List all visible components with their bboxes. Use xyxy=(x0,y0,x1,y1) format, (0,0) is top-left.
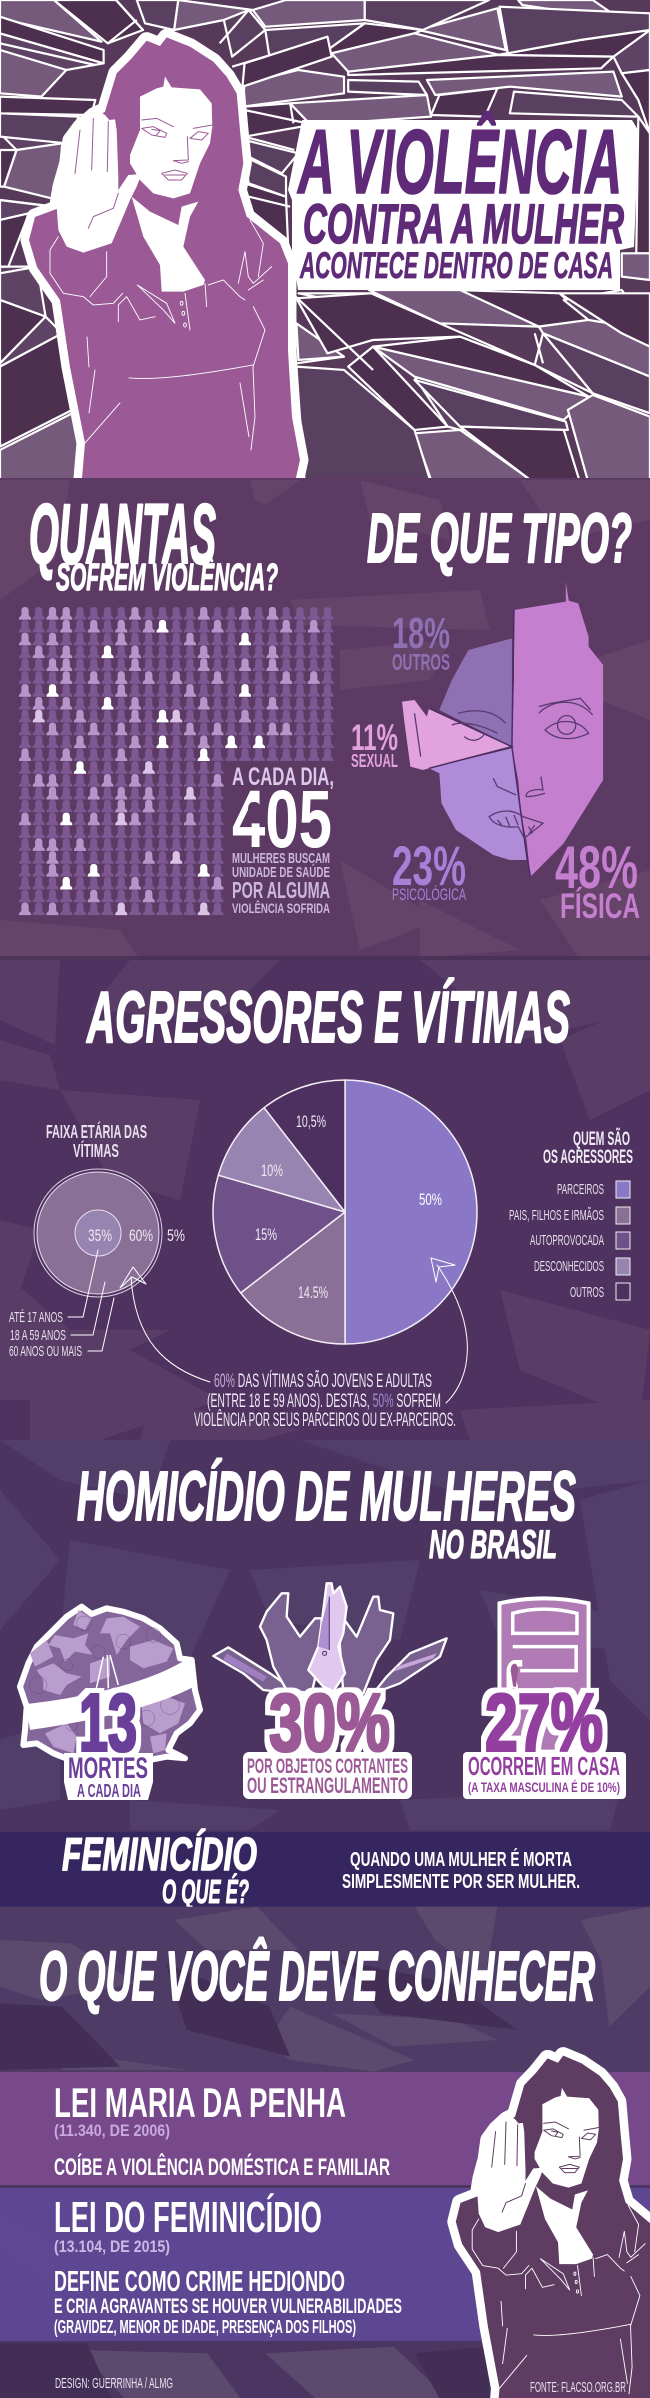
arrow: to 50% in pie xyxy=(431,1258,467,1403)
icon: door xyxy=(499,1598,589,1752)
chart: age range heading xyxy=(46,1121,147,1161)
illustration: face divided by violence type xyxy=(402,582,603,877)
band: lei maria da penha xyxy=(0,2072,650,2185)
stat: 30% objetos cortantes: POR OBJETOS CORTANTES xyxy=(247,1755,408,1778)
label: 23% psicológica: 23% xyxy=(392,834,466,897)
band: lei do feminicídio: (GRAVIDEZ, MENOR DE IDADE, PRESENÇA DOS FILHOS) xyxy=(54,2317,356,2337)
chart: age range leader lines and labels: 60 ANOS OU MAIS xyxy=(9,1343,82,1360)
label: 11% sexual xyxy=(351,717,398,771)
icon: funeral wreath xyxy=(20,1607,200,1760)
chart: pie value labels: 15% xyxy=(255,1225,277,1244)
title sticker background xyxy=(288,120,638,290)
band: lei do feminicídio: (13.104, DE 2015) xyxy=(54,2237,170,2256)
legend: who the aggressors are xyxy=(509,1128,633,1301)
label: 48% física xyxy=(555,834,640,926)
illustration: woman with raised hand xyxy=(29,37,300,490)
band: lei maria da penha: COÍBE A VIOLÊNCIA DOMÉSTICA E FAMILIAR xyxy=(54,2153,390,2181)
chart: pie value labels: 10% xyxy=(261,1161,283,1180)
illustration: woman with raised hand, dark xyxy=(456,2056,650,2398)
band: lei maria da penha: (11.340, DE 2006) xyxy=(54,2121,170,2140)
stat: 30% objetos cortantes: OU ESTRANGULAMENTO xyxy=(247,1773,408,1798)
credit: design: DESIGN: GUERRINHA / ALMG xyxy=(55,2375,173,2392)
panel: homicídio de mulheres xyxy=(0,1440,650,1910)
panel: o que você deve conhecer xyxy=(0,1907,650,2398)
band: feminicídio definition: FEMINICÍDIO xyxy=(62,1828,257,1880)
panel: quantas e de que tipo: QUANTAS xyxy=(29,487,216,581)
callout: victims and partners xyxy=(194,1370,456,1431)
chart: pie value labels: 50% xyxy=(419,1190,442,1209)
legend: who the aggressors are: PARCEIROS xyxy=(557,1181,604,1198)
stat: 13 mortes a cada dia: A CADA DIA xyxy=(77,1781,141,1801)
label: 11% sexual: SEXUAL xyxy=(351,751,398,771)
band: feminicídio definition xyxy=(0,1828,650,1910)
stat: 13 mortes a cada dia: MORTES xyxy=(68,1752,148,1785)
stat: 30% objetos cortantes: 30% xyxy=(269,1676,390,1769)
chart: pie value labels xyxy=(255,1112,442,1302)
band: lei do feminicídio: DEFINE COMO CRIME HEDIONDO xyxy=(54,2266,345,2298)
label: 23% psicológica xyxy=(392,834,466,904)
section background xyxy=(0,1907,650,2398)
chart: pie value labels: 14.5% xyxy=(298,1283,328,1302)
legend: who the aggressors are: OUTROS xyxy=(570,1284,604,1301)
label: 18% outros: 18% xyxy=(392,609,450,658)
chart: age range heading: VÍTIMAS xyxy=(73,1140,119,1161)
counter text: 405 per day: VIOLÊNCIA SOFRIDA xyxy=(232,899,330,916)
chart: age range leader lines and labels xyxy=(9,1250,114,1360)
label: 18% outros: OUTROS xyxy=(392,649,450,675)
icon: hands, knives and scissors xyxy=(213,1583,447,1693)
counter text: 405 per day: MULHERES BUSCAM xyxy=(232,850,330,867)
background: shattered glass xyxy=(0,0,650,483)
stat: 27% em casa xyxy=(463,1676,626,1799)
section background xyxy=(0,478,650,960)
band: lei do feminicídio xyxy=(0,2188,650,2341)
band: lei do feminicídio: LEI DO FEMINICÍDIO xyxy=(54,2192,322,2242)
chart: who the aggressors are pie xyxy=(213,1080,477,1344)
chart: age range donut: 35% xyxy=(88,1226,112,1245)
stat: 13 mortes a cada dia: 13 xyxy=(79,1676,137,1769)
counter text: 405 per day: A CADA DIA, xyxy=(232,763,334,791)
callout: victims and partners: 60% DAS VÍTIMAS SÃO JOVENS E ADULTAS xyxy=(214,1370,432,1392)
section background xyxy=(0,960,650,1440)
counter text: 405 per day xyxy=(232,763,334,916)
stat: 27% em casa: 27% xyxy=(485,1676,603,1769)
chart: age range donut: 5% xyxy=(167,1226,185,1245)
chart: age range leader lines and labels: ATÉ 17 ANOS xyxy=(9,1309,63,1326)
label: 18% outros xyxy=(392,609,450,675)
band: feminicídio definition: O QUE É? xyxy=(162,1873,249,1910)
panel: agressores e vítimas xyxy=(0,960,650,1440)
chart: pie value labels: 10,5% xyxy=(296,1112,326,1131)
chart: age range leader lines and labels: 18 A 59 ANOS xyxy=(10,1327,66,1344)
chart: age range donut: 60% xyxy=(129,1226,153,1245)
counter text: 405 per day: 405 xyxy=(232,774,332,865)
panel: quantas e de que tipo xyxy=(0,478,650,960)
section background xyxy=(0,1440,650,1910)
arrow: to 60% in donut xyxy=(120,1267,210,1382)
label: 23% psicológica: PSICOLÓGICA xyxy=(392,885,466,904)
stat: 13 mortes a cada dia xyxy=(64,1676,153,1801)
heading: no brasil: NO BRASIL xyxy=(429,1523,557,1567)
stat: 30% objetos cortantes xyxy=(243,1676,412,1799)
chart: age range donut xyxy=(34,1169,185,1297)
panel: hero xyxy=(0,0,650,490)
chart: age range heading: FAIXA ETÁRIA DAS xyxy=(46,1121,147,1142)
heading: sofrem violência: SOFREM VIOLÊNCIA? xyxy=(56,555,278,599)
counter text: 405 per day: UNIDADE DE SAÚDE xyxy=(232,863,330,881)
band: lei do feminicídio: E CRIA AGRAVANTES SE HOUVER VULNERABILIDADES xyxy=(54,2295,402,2318)
counter text: 405 per day: POR ALGUMA xyxy=(232,877,330,903)
label: 11% sexual: 11% xyxy=(351,717,398,758)
band: lei maria da penha: LEI MARIA DA PENHA xyxy=(54,2079,346,2126)
pictogram grid of women xyxy=(19,607,335,915)
callout: victims and partners: (ENTRE 18 E 59 ANOS). DESTAS, 50% SOFREM xyxy=(207,1391,441,1412)
